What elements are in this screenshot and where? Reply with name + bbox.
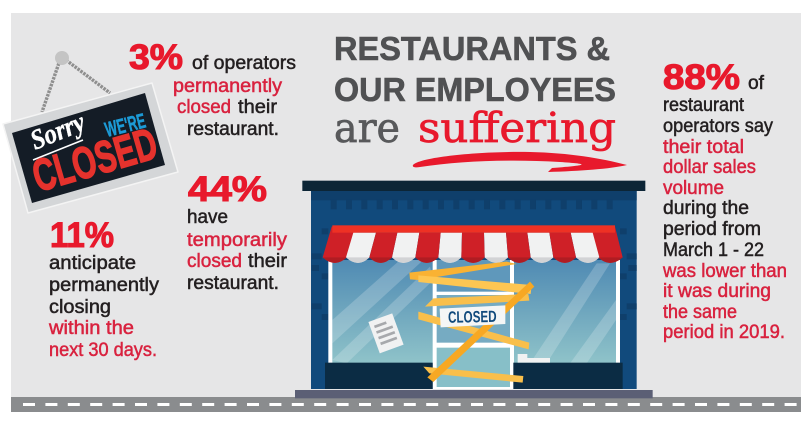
stat: 44 percent temporarily closed: 44% — [188, 170, 267, 209]
title: OUR EMPLOYEES — [334, 71, 616, 108]
door sign: closed: CLOSED — [448, 308, 497, 327]
stat: 88 percent lower sales: their total — [663, 136, 744, 158]
icon: hanging closed sign — [3, 51, 178, 213]
stat: 11 percent anticipate closing: next 30 days. — [49, 339, 157, 361]
sidewalk — [295, 390, 653, 398]
stat: 88 percent lower sales: during the — [663, 197, 749, 219]
stat: 11 percent anticipate closing: anticipate — [49, 252, 136, 274]
stat: 88 percent lower sales — [662, 58, 787, 343]
door sign: closed — [440, 305, 505, 327]
lower wall left — [325, 363, 433, 389]
caution tape — [409, 262, 534, 383]
stat: 88 percent lower sales: period in 2019. — [663, 321, 785, 343]
title: RESTAURANTS & — [334, 30, 610, 67]
stat: 88 percent lower sales: March 1 - 22 — [663, 239, 764, 261]
window paper notice — [368, 313, 404, 353]
stat: 88 percent lower sales: it was during — [663, 280, 771, 302]
lower wall right — [513, 363, 623, 389]
stat: 88 percent lower sales: volume — [663, 177, 724, 199]
boxes on window ledge — [518, 354, 550, 363]
stat: 3 percent permanently closed: their — [238, 96, 278, 118]
stat: 11 percent anticipate closing — [48, 216, 159, 361]
stat: 88 percent lower sales: of — [748, 72, 765, 94]
stat: 44 percent temporarily closed: their — [248, 250, 288, 272]
stat: 88 percent lower sales: dollar sales — [663, 156, 756, 178]
stat: 44 percent temporarily closed: restaurant. — [187, 272, 279, 294]
shop window — [328, 260, 620, 363]
stat: 11 percent anticipate closing: closing — [49, 296, 111, 318]
stat: 88 percent lower sales: was lower than — [662, 260, 787, 282]
sign face — [12, 93, 165, 203]
stat: 3 percent permanently closed: 3% — [129, 38, 183, 77]
stat: 3 percent permanently closed: of operators — [192, 52, 296, 74]
stat: 3 percent permanently closed: permanently — [173, 75, 282, 97]
stat: 44 percent temporarily closed: have — [187, 206, 228, 228]
awning — [323, 225, 623, 263]
stat: 44 percent temporarily closed — [187, 170, 288, 294]
stat: 11 percent anticipate closing: 11% — [50, 216, 114, 255]
stat: 11 percent anticipate closing: within the — [48, 317, 134, 339]
sign chain — [42, 60, 110, 112]
icon: closed storefront — [295, 181, 653, 398]
sign frame — [3, 83, 178, 213]
door — [433, 260, 514, 389]
sign nail — [55, 51, 69, 65]
stat: 88 percent lower sales: 88% — [663, 58, 740, 97]
stat: 44 percent temporarily closed: closed — [187, 250, 242, 272]
sign underline — [33, 140, 83, 160]
stat: 88 percent lower sales: operators say — [663, 115, 773, 137]
roof — [302, 181, 645, 191]
stat: 3 percent permanently closed — [129, 38, 296, 140]
stat: 88 percent lower sales: restaurant — [663, 94, 745, 116]
building wall — [311, 191, 637, 389]
stat: 11 percent anticipate closing: permanently — [49, 274, 159, 296]
red brush underline — [413, 152, 627, 172]
title: are — [334, 104, 400, 152]
sign text: closed: CLOSED — [27, 118, 163, 202]
sign text: Sorry: Sorry — [26, 107, 90, 156]
title — [334, 30, 627, 172]
wall shading — [311, 191, 637, 320]
title: suffering — [418, 104, 616, 152]
sign text: we're: WE'RE — [103, 110, 148, 142]
stat: 88 percent lower sales: the same — [663, 301, 737, 323]
stat: 44 percent temporarily closed: temporarily — [187, 229, 287, 251]
road — [11, 397, 801, 412]
stat: 88 percent lower sales: period from — [663, 218, 761, 240]
stat: 3 percent permanently closed: closed — [177, 96, 231, 118]
stat: 3 percent permanently closed: restaurant. — [187, 118, 279, 140]
